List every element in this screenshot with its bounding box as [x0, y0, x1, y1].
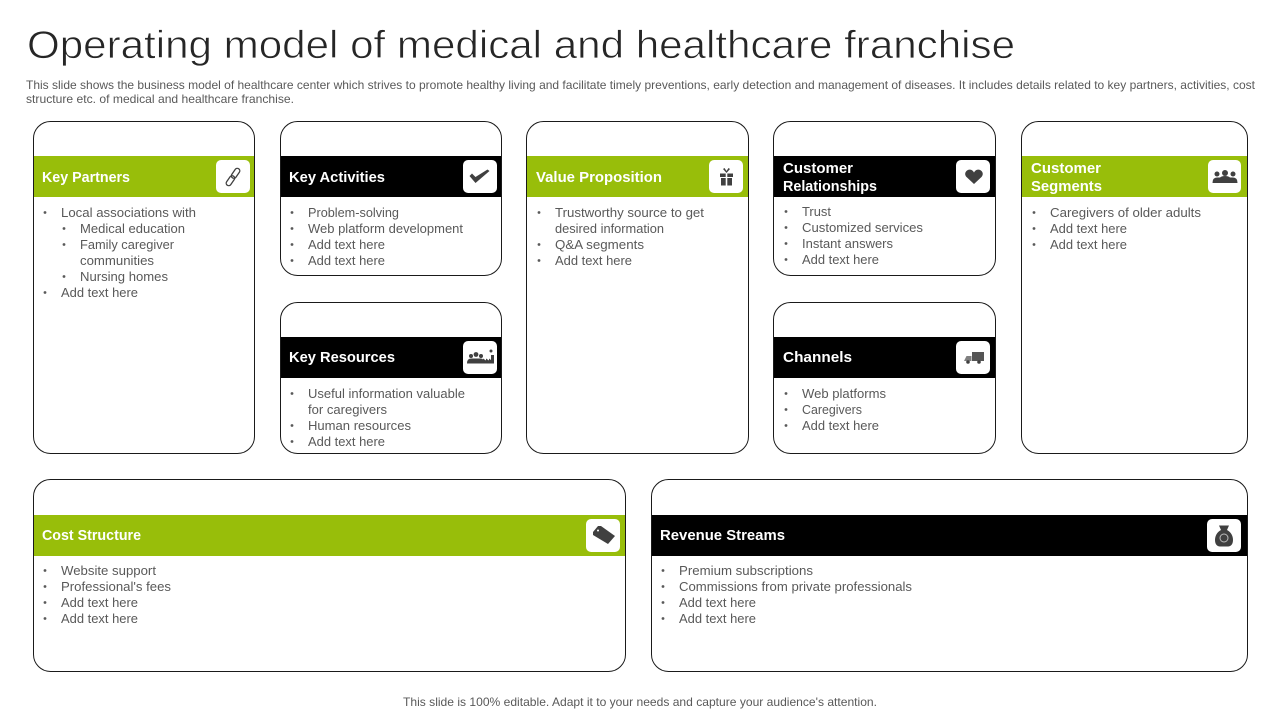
value proposition bullet list: desired information — [555, 222, 664, 236]
relationships bullet list: Instant answers — [802, 237, 893, 251]
resources bullet list: Add text here — [308, 435, 385, 449]
segments bullet list: Add text here — [1050, 238, 1127, 252]
panel: customer segments — [1022, 122, 1248, 454]
panel: cost structure — [34, 480, 626, 672]
relationships bullet list: Add text here — [802, 253, 879, 267]
cost bullet list: Add text here — [61, 596, 138, 610]
segments bullet list — [1033, 206, 1201, 252]
icon: group of people — [1208, 160, 1241, 193]
resources bullet list — [291, 387, 465, 449]
activities bullet list: Add text here — [308, 254, 385, 268]
cost bullet list — [44, 564, 171, 626]
value proposition bullet list: Q&A segments — [555, 238, 644, 252]
description text — [26, 78, 1256, 106]
relationships bullet list: Customized services — [802, 221, 923, 235]
activities bullet list: Add text here — [308, 238, 385, 252]
panel: channels — [774, 302, 996, 454]
cost bullet list: Website support — [61, 564, 157, 578]
partners bullet list: Add text here — [61, 286, 138, 300]
activities bullet list — [291, 206, 464, 268]
activities bullet list: Web platform development — [308, 222, 464, 236]
panel: revenue streams — [652, 480, 1248, 672]
icon: price tag — [586, 519, 620, 552]
partners bullet list: Local associations with — [61, 206, 196, 220]
icon: heart — [956, 160, 990, 193]
cost bullet list: Professional's fees — [61, 580, 171, 594]
panel: revenue streams: Revenue Streams — [660, 527, 785, 544]
icon: gift box — [709, 160, 743, 193]
relationships bullet list: Trust — [802, 205, 832, 219]
icon: delivery truck — [956, 341, 990, 374]
panel: key activities: Key Activities — [289, 169, 385, 186]
activities bullet list: Problem-solving — [308, 206, 399, 220]
resources bullet list: Useful information valuable — [308, 387, 465, 401]
value proposition bullet list: Add text here — [555, 254, 632, 268]
panel: key activities — [280, 122, 502, 276]
partners bullet list: Family caregiver — [80, 238, 174, 252]
panel: cost structure: Cost Structure — [42, 527, 141, 544]
channels bullet list — [785, 387, 886, 433]
segments bullet list: Caregivers of older adults — [1050, 206, 1201, 220]
revenue bullet list: Commissions from private professionals — [679, 580, 912, 594]
partners bullet list: Medical education — [80, 222, 185, 236]
revenue bullet list — [662, 564, 912, 626]
revenue bullet list: Add text here — [679, 612, 756, 626]
panel: key partners: Key Partners — [42, 169, 130, 186]
channels bullet list: Add text here — [802, 419, 879, 433]
cost bullet list: Add text here — [61, 612, 138, 626]
icon: people and factory — [463, 341, 497, 374]
panel: customer segments: Customer — [1031, 160, 1101, 177]
relationships bullet list — [785, 205, 923, 267]
partners bullet list: communities — [80, 254, 154, 268]
panel: key resources: Key Resources — [289, 349, 395, 366]
channels bullet list: Caregivers — [802, 403, 862, 417]
resources bullet list: for caregivers — [308, 403, 387, 417]
panel: key resources — [280, 302, 502, 454]
icon: check mark — [463, 160, 497, 193]
description text: structure etc. of medical and healthcare franchise. — [26, 92, 294, 106]
icon: money bag — [1207, 519, 1241, 552]
revenue bullet list: Premium subscriptions — [679, 564, 813, 578]
panel: customer segments: Segments — [1031, 178, 1102, 195]
panel: customer relationships: Relationships — [783, 178, 877, 195]
panel: customer relationships — [774, 122, 996, 276]
title: Operating model of medical and healthcare franchise — [27, 24, 1015, 67]
value proposition bullet list: Trustworthy source to get — [555, 206, 705, 220]
partners bullet list — [44, 206, 196, 300]
revenue bullet list: Add text here — [679, 596, 756, 610]
panel: key partners — [34, 122, 254, 454]
value proposition bullet list — [538, 206, 705, 268]
channels bullet list: Web platforms — [802, 387, 886, 401]
icon: link — [216, 160, 250, 193]
panel: value proposition — [526, 122, 748, 454]
footer note: This slide is 100% editable. Adapt it to your needs and capture your audience's attention. — [403, 695, 877, 709]
partners bullet list: Nursing homes — [80, 270, 168, 284]
resources bullet list: Human resources — [308, 419, 411, 433]
segments bullet list: Add text here — [1050, 222, 1127, 236]
description text: This slide shows the business model of healthcare center which strives to promote healthy living and facilitate timely preventions, early detection and management of diseases. It includes details related to key partners, activities, cost — [26, 78, 1256, 92]
panel: channels: Channels — [783, 349, 852, 366]
panel: customer relationships: Customer — [783, 160, 853, 177]
panel: value proposition: Value Proposition — [536, 169, 662, 186]
